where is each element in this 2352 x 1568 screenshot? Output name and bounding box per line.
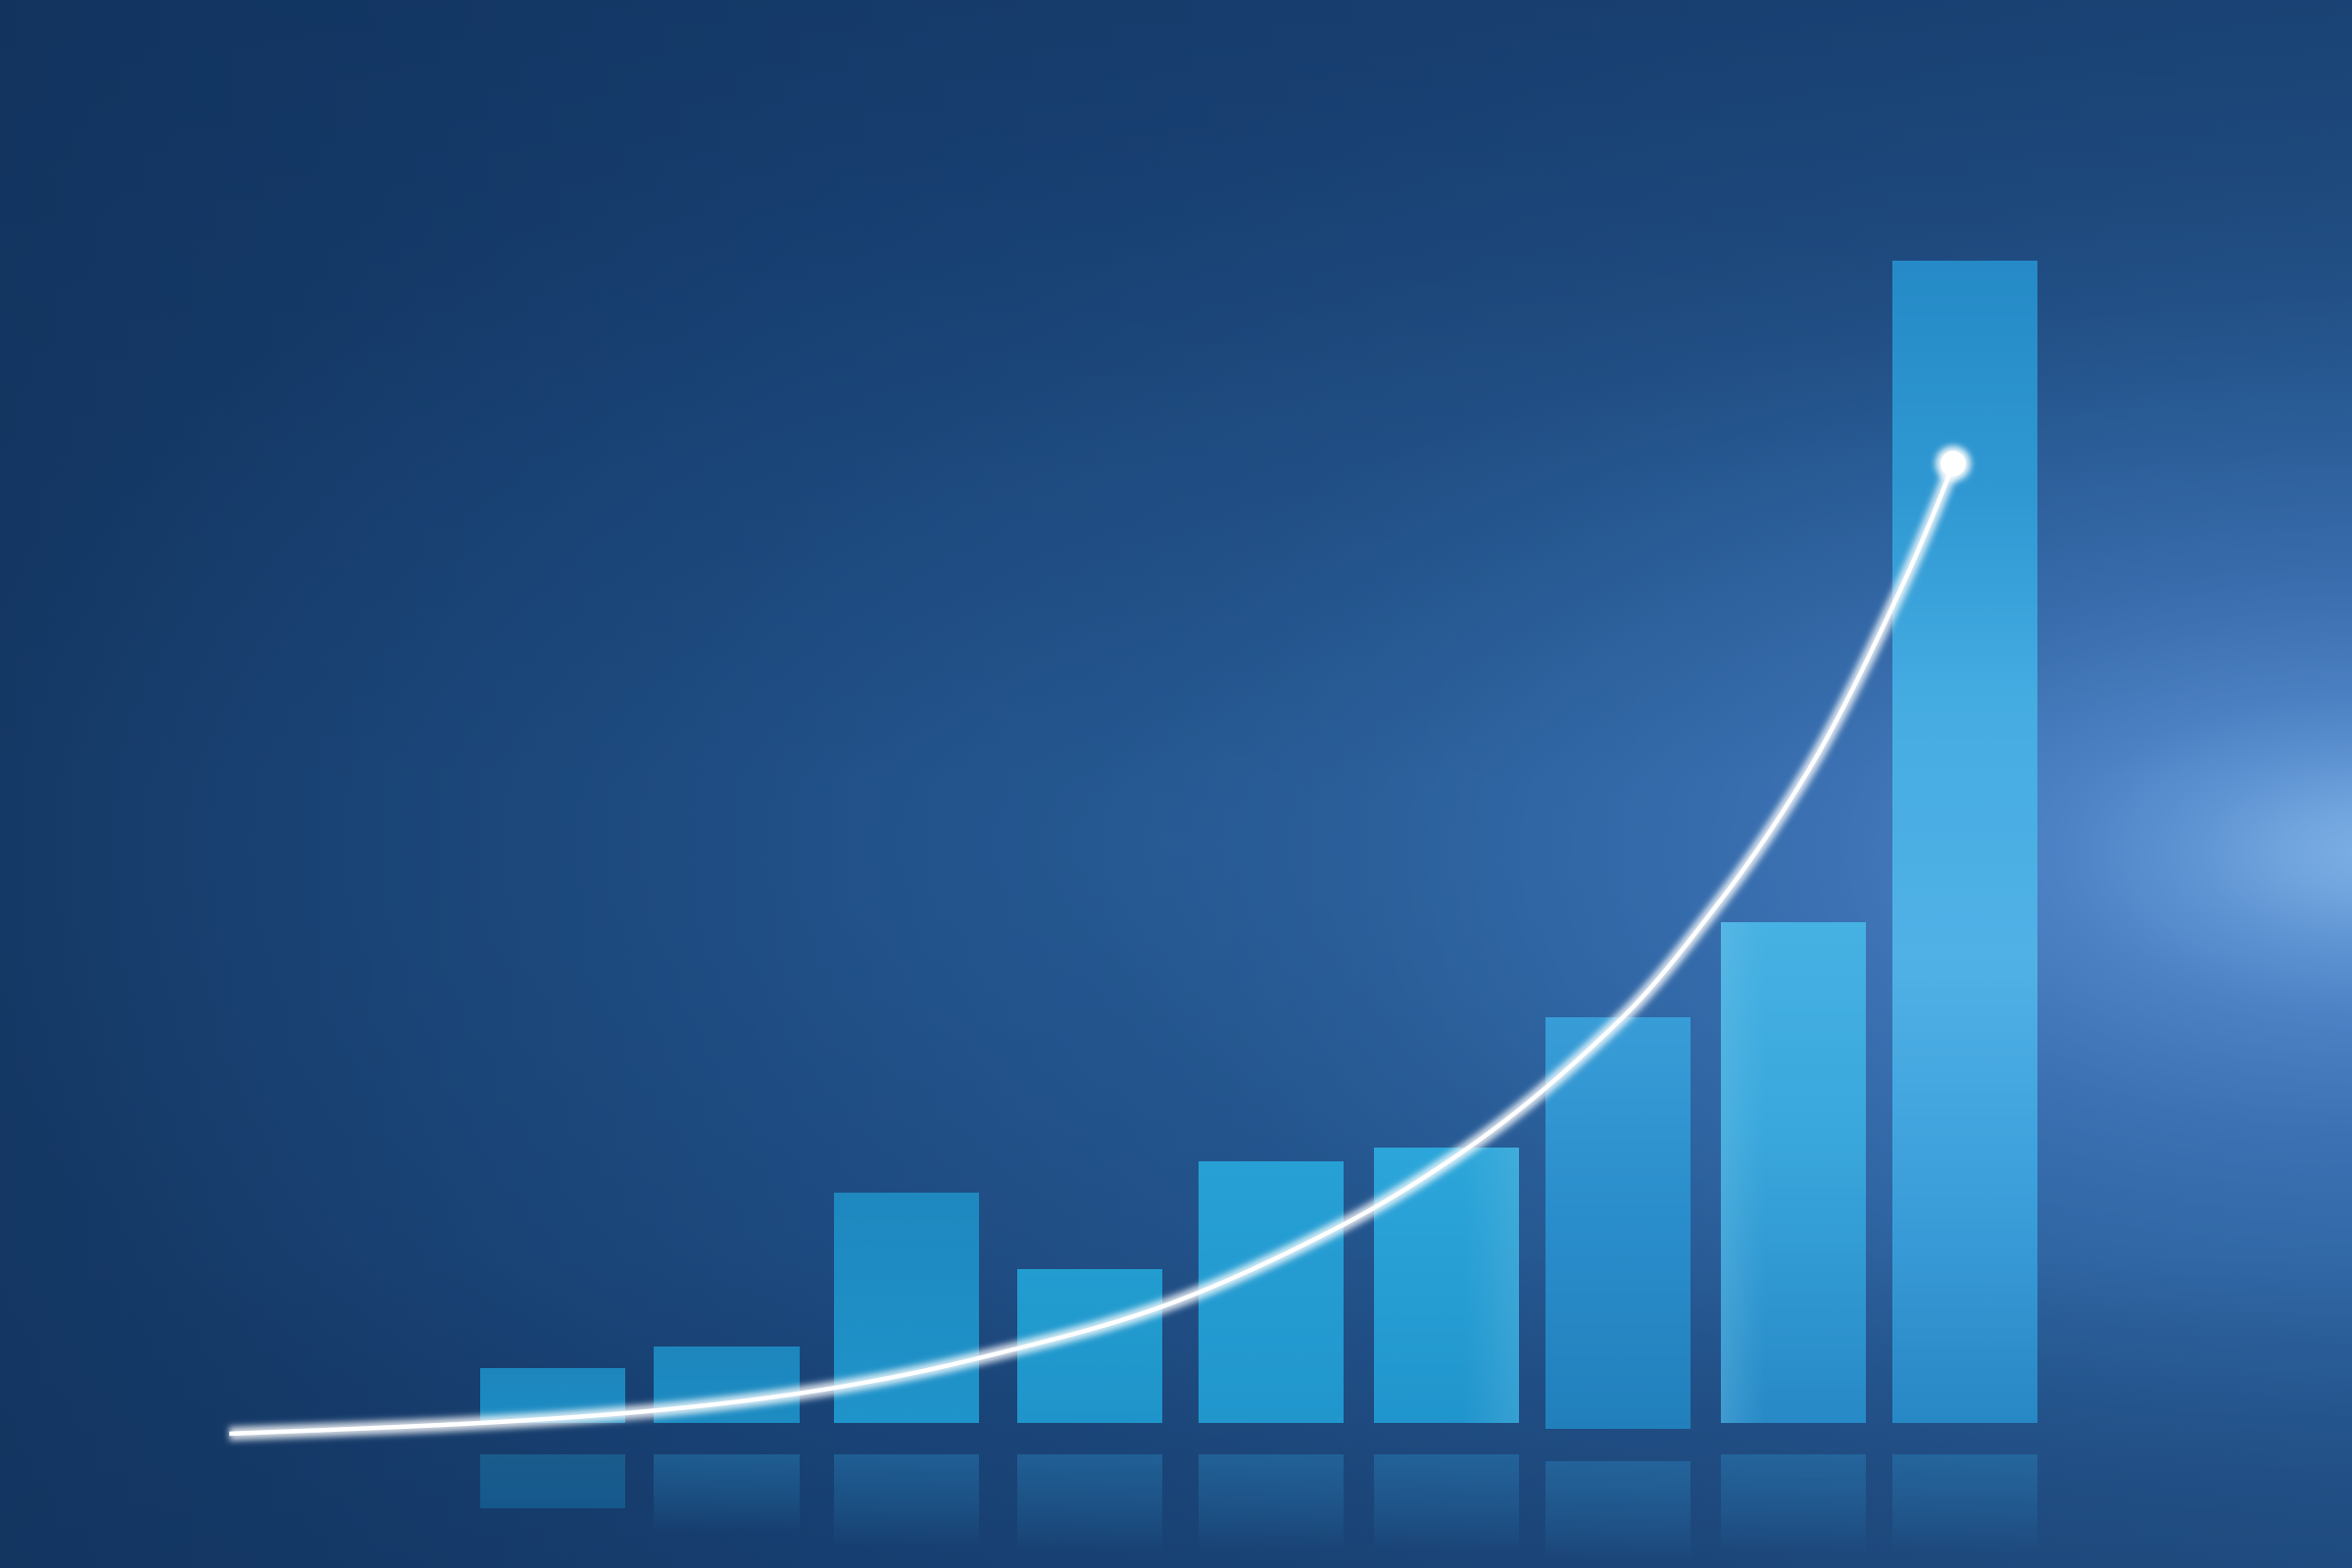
bar 2	[654, 1347, 800, 1423]
growth curve with glow	[229, 472, 1950, 1434]
bar 7	[1545, 1017, 1690, 1429]
bar 3	[834, 1193, 979, 1423]
bar 5	[1199, 1161, 1344, 1423]
bar chart reflections	[480, 1454, 2037, 1559]
bar 6	[1374, 1148, 1519, 1423]
bar 4	[1017, 1269, 1162, 1423]
bar 9	[1892, 261, 2037, 1423]
bar 8	[1721, 922, 1866, 1423]
bar 1	[480, 1368, 625, 1423]
bar chart	[480, 261, 2037, 1429]
glowing end point	[1936, 446, 1971, 481]
